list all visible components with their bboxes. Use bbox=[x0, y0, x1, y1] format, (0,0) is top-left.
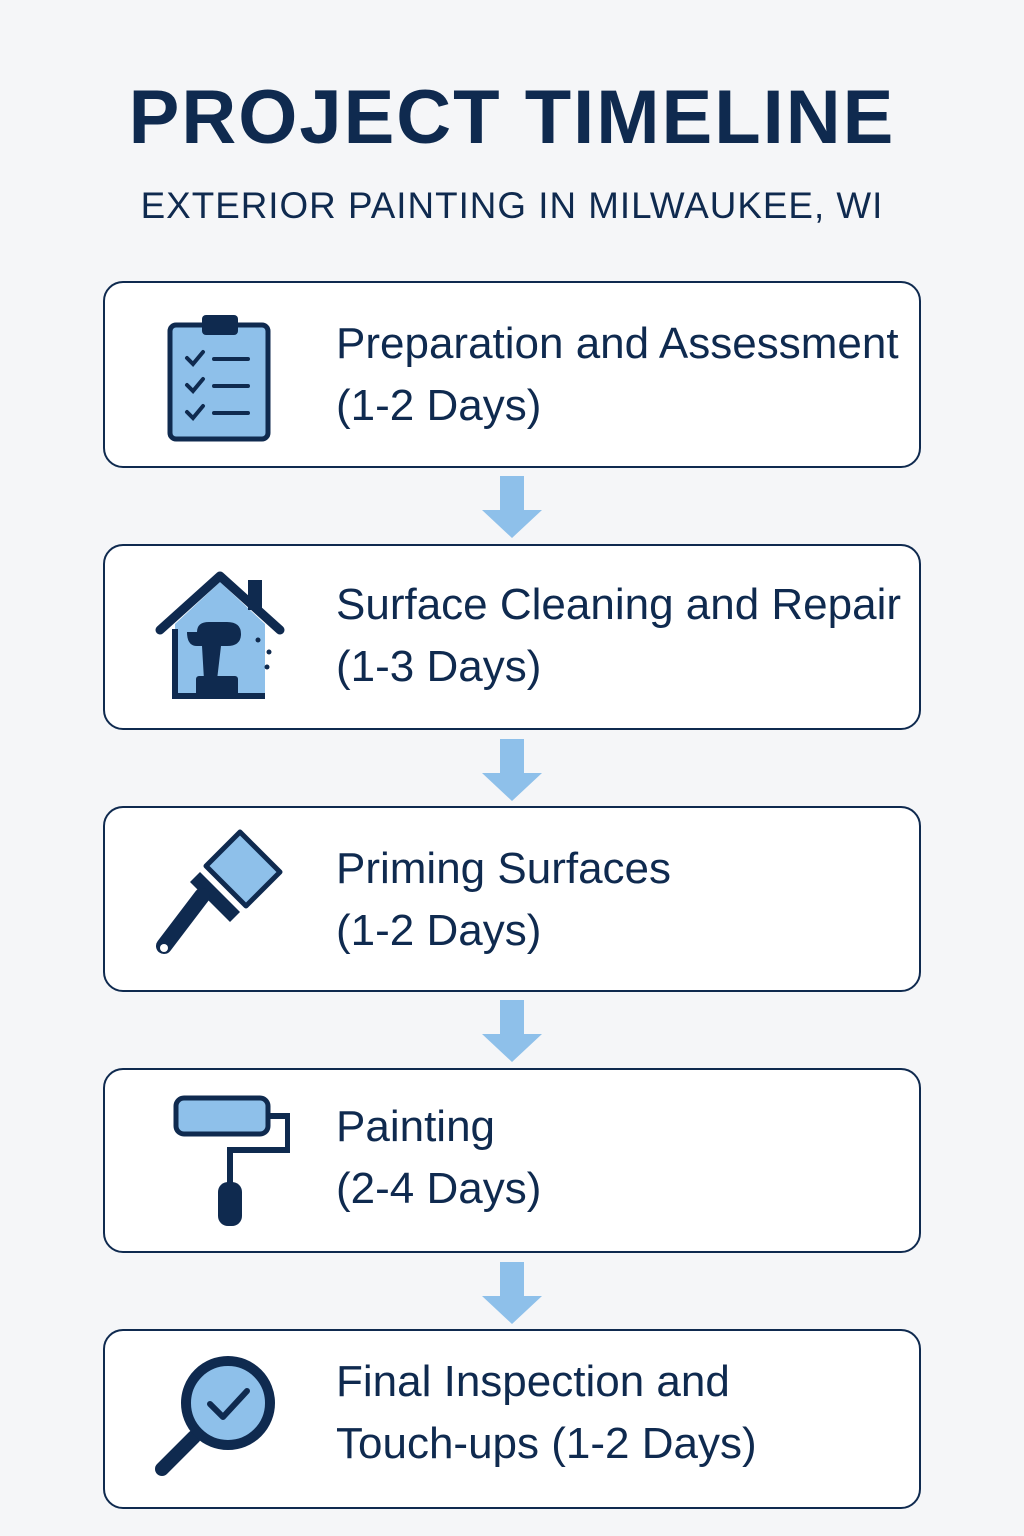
icon: paintbrush bbox=[156, 830, 282, 954]
text: step 3 bbox=[336, 844, 671, 955]
arrow bbox=[482, 1262, 542, 1324]
text: step 4 bbox=[336, 1102, 541, 1213]
text: step 2: Surface Cleaning and Repair bbox=[336, 580, 901, 629]
text: step 3: (1-2 Days) bbox=[336, 906, 541, 955]
text: step 5: Final Inspection and bbox=[336, 1357, 730, 1406]
text: step 2 bbox=[336, 580, 901, 691]
text: step 4: (2-4 Days) bbox=[336, 1164, 541, 1213]
icon: house with drill bbox=[156, 572, 284, 699]
panel: painting bbox=[103, 1068, 921, 1253]
text: step 1 bbox=[336, 319, 899, 430]
subtitle: EXTERIOR PAINTING IN MILWAUKEE, WI bbox=[141, 185, 883, 226]
text: step 1: (1-2 Days) bbox=[336, 381, 541, 430]
panel: priming bbox=[103, 806, 921, 992]
arrow bbox=[482, 1000, 542, 1062]
text: step 4: Painting bbox=[336, 1102, 495, 1151]
panel: final inspection bbox=[103, 1329, 921, 1509]
text: step 1: Preparation and Assessment bbox=[336, 319, 899, 368]
text: step 5: Touch-ups (1-2 Days) bbox=[336, 1419, 757, 1468]
text: step 5 bbox=[336, 1357, 757, 1468]
title: PROJECT TIMELINE bbox=[129, 75, 895, 160]
icon: magnifier with check bbox=[155, 1356, 275, 1476]
arrow bbox=[482, 739, 542, 801]
text: step 2: (1-3 Days) bbox=[336, 642, 541, 691]
text: step 3: Priming Surfaces bbox=[336, 844, 671, 893]
panel: preparation bbox=[103, 281, 921, 468]
arrow bbox=[482, 476, 542, 538]
icon: paint roller bbox=[174, 1096, 290, 1226]
icon: clipboard bbox=[168, 315, 270, 442]
panel: cleaning bbox=[103, 544, 921, 730]
